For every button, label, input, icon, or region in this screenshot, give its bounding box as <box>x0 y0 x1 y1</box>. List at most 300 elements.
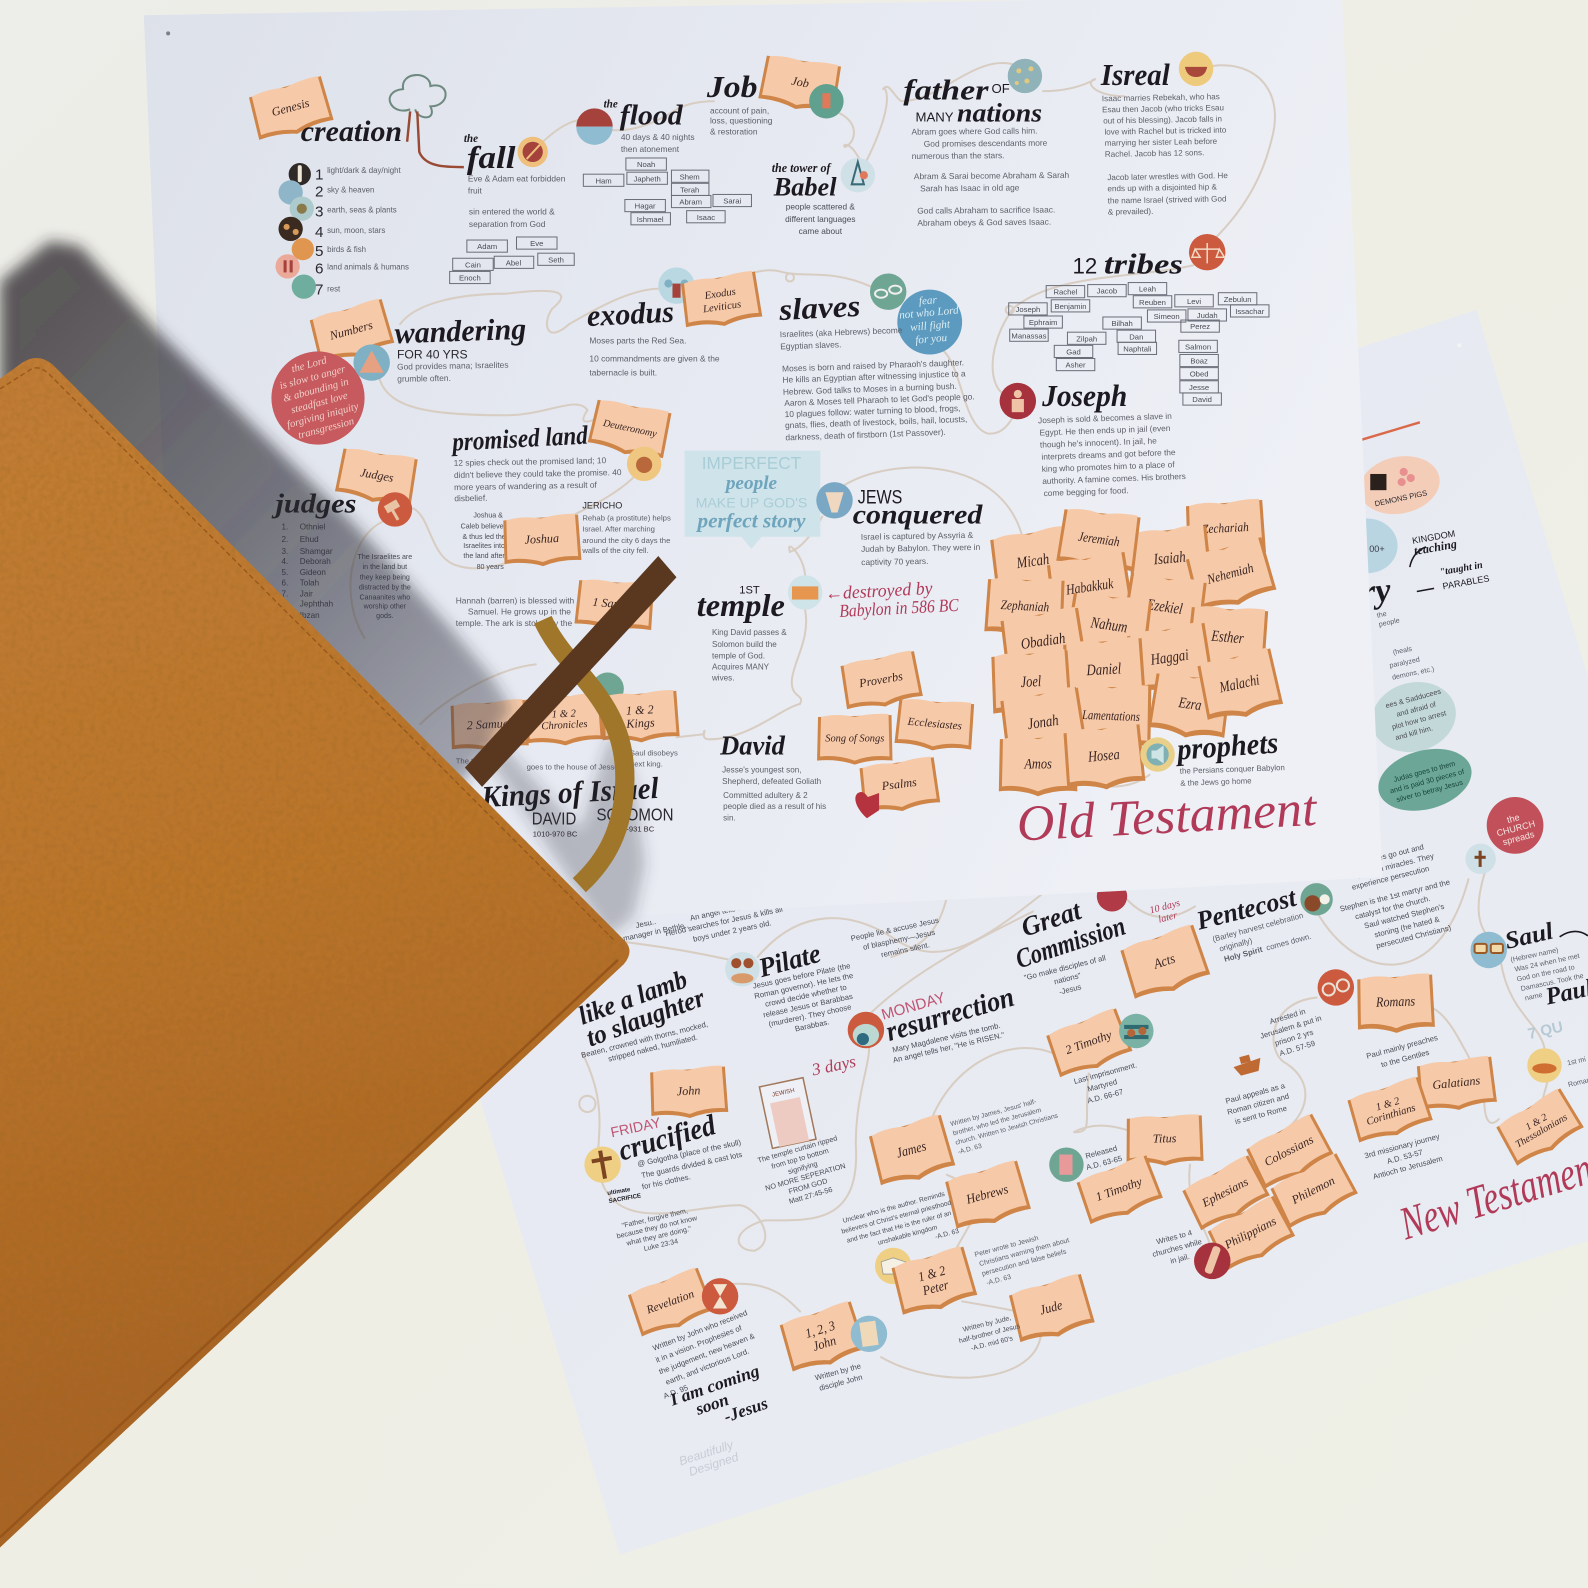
text: Joshua and Caleb: Israelites into <box>463 542 505 550</box>
text: Hebrews: Unclear who is the author. Reminds <box>842 1191 946 1225</box>
heading: resurrection: resurrection <box>883 982 1018 1048</box>
text: judges story: worship other <box>363 603 407 611</box>
text: Father forgive them: because they do not know <box>616 1214 699 1240</box>
text: slaves: Hebrew. God talks to Moses in a burning bush. <box>783 381 957 397</box>
hidden sheet upper-right fragments: paralyzed <box>1389 656 1421 670</box>
text: James: brother, who led the Jerusalem <box>952 1107 1043 1137</box>
text: Writes to 4 churches: in jail. <box>1169 1252 1191 1266</box>
hidden sheet upper-right fragments: Judas goes to them <box>1392 759 1456 784</box>
heading: father of many nations: MANY <box>916 110 954 125</box>
icon: the church spreads: CHURCH <box>1496 818 1536 838</box>
book: Colossians <box>1244 1112 1335 1192</box>
quote: I am coming soon: -Jesus <box>722 1394 771 1426</box>
family tree: Noah: Japheth <box>633 174 661 183</box>
book: Acts <box>1118 923 1212 1003</box>
icon: the church spreads: spreads <box>1502 829 1536 847</box>
text: temple curtain ripped: Matt 27:45-56 <box>788 1185 833 1206</box>
hidden sheet upper-right fragments <box>1337 343 1490 821</box>
list: days of creation: 3 <box>315 204 323 221</box>
book: 1 and 2 Peter: Peter <box>920 1277 950 1299</box>
list: days of creation: land animals & humans <box>327 262 409 271</box>
book: John <box>649 1065 728 1120</box>
text: Job: loss, questioning <box>710 116 773 126</box>
list: days of creation: 4 <box>315 224 323 241</box>
text: 3rd journey: Antioch to Jerusalem <box>1372 1154 1444 1181</box>
hidden sheet upper-right fragments: teaching <box>1413 537 1458 558</box>
hidden sheet upper-right fragments: the <box>1376 610 1387 620</box>
hidden sheet upper-right fragments: 00+ <box>1369 544 1385 554</box>
book: 1 Samuel: 1 Samuel <box>592 595 638 613</box>
text: Jude: -A.D. mid 60's <box>970 1335 1014 1352</box>
book cluster: prophets: Malachi <box>1217 671 1261 696</box>
text: Jericho: Israel. After marching <box>582 525 655 534</box>
text: Arrested: A.D. 57-59 <box>1278 1039 1316 1058</box>
text: Saul story: God on the road to <box>1516 963 1575 983</box>
icon: Joseph coat <box>1000 383 1036 419</box>
list: days of creation: birds & fish <box>327 245 366 254</box>
book: Joshua: Joshua <box>524 531 559 547</box>
heading: father of many nations: father <box>903 75 990 106</box>
book: Titus: Titus <box>1153 1131 1177 1146</box>
text: Holy Spirit: Holy Spirit <box>1223 945 1264 964</box>
family tree: twelve tribes: Zilpah <box>1076 334 1097 343</box>
heading: father of many nations: OF <box>991 81 1010 96</box>
text: Stephen: perform miracles. They <box>1356 851 1435 879</box>
text: Go make disciples: -Jesus <box>1058 982 1082 997</box>
text: Saul story: Was 24 when he met <box>1514 952 1580 974</box>
text: temple: King David passes & <box>712 628 787 637</box>
callout: red verse circle: steadfast love <box>290 391 349 416</box>
text: Arrested: Jerusalem & put in <box>1259 1013 1323 1041</box>
icon: Pilate plate <box>725 952 760 986</box>
text: Stephen: Saul watched Stephen's <box>1363 902 1445 930</box>
list: days of creation: sun, moon, stars <box>327 226 385 235</box>
family tree: twelve tribes: David <box>1192 395 1212 404</box>
book cluster: prophets: Ezra <box>1177 694 1203 714</box>
list: judges: Tolah <box>300 578 319 587</box>
family tree: Noah: Abram <box>679 198 702 207</box>
book cluster: prophets: Hosea <box>1086 746 1120 765</box>
book cluster: prophets: Habakkuk <box>1064 575 1115 598</box>
book cluster: prophets: Zechariah <box>1202 519 1249 537</box>
heading: prophets: prophets <box>1173 726 1279 767</box>
text: Paul preaches: Paul mainly preaches <box>1365 1033 1439 1061</box>
family tree: twelve tribes: Gad <box>1066 347 1081 356</box>
list: days of creation: 6 <box>315 260 323 277</box>
heading: crucified: crucified <box>615 1109 720 1167</box>
text: kings note: goes to the house of Jesse <box>527 763 619 772</box>
list: judges: Jair <box>300 590 313 599</box>
book: 1 2 3 John <box>778 1300 868 1376</box>
family tree: Noah: Isaac <box>697 213 715 222</box>
callout: the Lord will fight for you: fear <box>918 294 938 308</box>
icon: stars <box>1008 59 1042 93</box>
book: 1 and 2 Chronicles <box>524 693 604 747</box>
text: accused: of blasphemy—Jesus <box>862 928 936 952</box>
book: 1 Timothy <box>1075 1154 1164 1228</box>
text: Israel: ends up with a disjointed hip & <box>1107 182 1217 193</box>
text: Released: A.D. 63-65 <box>1085 1154 1123 1172</box>
text: Joseph: Joseph is sold & becomes a slave in <box>1038 411 1172 425</box>
text: Jude: Written by Jude, <box>962 1315 1012 1334</box>
icon: Job figure <box>809 84 844 118</box>
icon: handcuffs <box>1318 969 1354 1006</box>
text: James: -A.D. 63 <box>957 1143 983 1156</box>
callout: red verse circle: forgiving iniquity <box>286 401 360 431</box>
family tree: twelve tribes: Benjamin <box>1054 302 1087 311</box>
text: Abraham: Abram goes where God calls him. <box>911 126 1037 137</box>
heading: father of many nations: nations <box>957 99 1042 128</box>
list: judges: 4. <box>282 557 288 566</box>
text: exodus: Moses parts the Red Sea. <box>589 335 686 345</box>
icon: prison bars <box>1119 1014 1154 1048</box>
icon: forbidden fruit <box>518 137 548 167</box>
book: James <box>867 1113 956 1190</box>
family tree: twelve tribes: Boaz <box>1190 357 1208 366</box>
text: Golgotha: @ Golgotha (place of the skull) <box>637 1138 742 1168</box>
family tree: twelve tribes: Jacob <box>1097 287 1117 296</box>
label: ultimate sacrifice: SACRIFICE <box>608 1193 642 1205</box>
text: Arrested: prison 2 yrs <box>1274 1028 1314 1048</box>
watermark: Designed <box>687 1449 741 1479</box>
family tree: Adam: Cain <box>465 260 481 269</box>
book: Deuteronomy: Deuteronomy <box>601 418 658 440</box>
text: Israel: Jacob later wrestles with God. He <box>1107 171 1228 182</box>
text: prophets: & the Jews go home <box>1180 776 1252 788</box>
text: slaves: Moses is born and raised by Pharaoh's daughter. <box>782 357 964 374</box>
text: Eve and Adam: sin entered the world & <box>469 207 555 217</box>
text: Holy Spirit: comes down. <box>1263 932 1312 953</box>
text: David: Jesse's youngest son, <box>722 766 801 775</box>
callout: the Lord will fight for you: for you <box>915 332 948 347</box>
book cluster: prophets: Nehemiah <box>1205 560 1255 587</box>
label: 3 days: 3 days <box>809 1052 858 1080</box>
text: Writes to 4 churches: churches while <box>1151 1237 1203 1259</box>
book cluster: prophets: Ezekiel <box>1145 596 1184 618</box>
text: judges story: Canaanites who <box>359 594 410 602</box>
text: temple: temple of God. <box>712 651 765 660</box>
heading: the flood: the <box>604 98 618 110</box>
text: Israel: out of his blessing). Jacob falls in <box>1103 114 1222 126</box>
book: 1 and 2 Corinthians: Corinthians <box>1365 1103 1417 1128</box>
text: slaves: darkness, death of firstborn (1st Passover). <box>785 427 946 442</box>
book: Deuteronomy <box>587 396 673 462</box>
heading: Pentecost: Pentecost <box>1193 883 1299 936</box>
heading: wandering: wandering <box>394 312 527 350</box>
book: Proverbs: Proverbs <box>857 669 904 691</box>
text: judges story: distracted by the <box>359 583 411 591</box>
text: kings note: Saul disobeys <box>630 749 678 758</box>
callout: imperfect people: MAKE UP GOD'S <box>696 495 807 511</box>
heading: the fall: fall <box>467 140 516 175</box>
book: 1 and 2 Corinthians: 1 & 2 <box>1375 1096 1402 1113</box>
book: 1 and 2 Kings: Kings <box>625 715 655 731</box>
text: temple curtain ripped: from top to bottom <box>770 1146 830 1171</box>
brown ribbon bookmark <box>465 556 677 787</box>
text: John disciple: disciple John <box>818 1373 863 1393</box>
gold ribbon bookmark <box>543 620 625 885</box>
book: Ephesians <box>1180 1154 1272 1234</box>
heading: 1st temple: 1ST <box>739 584 760 596</box>
text: Pilate story: Roman governor). He lets the <box>753 971 854 1001</box>
family tree: twelve tribes: Bilhah <box>1111 319 1133 328</box>
text: David: sin. <box>723 813 736 822</box>
family tree: twelve tribes: Naphtali <box>1123 344 1152 353</box>
family tree: Noah: Ham <box>595 176 612 185</box>
icon: ascension circle <box>1097 881 1127 911</box>
text: temple: Solomon build the <box>712 640 777 649</box>
heading: 1st temple: temple <box>697 588 785 623</box>
text: Stephen: stoning (he hated & <box>1373 915 1440 939</box>
family tree: twelve tribes: Leah <box>1139 285 1156 294</box>
book: 1 and 2 Peter <box>890 1245 978 1319</box>
note: destroyed by Babylon: ←destroyed by <box>825 578 934 604</box>
book: 1 2 3 John: John <box>811 1333 838 1354</box>
text: manger and Herod fragment: manager in Bethle.. <box>622 920 689 943</box>
quote: I am coming soon: soon <box>692 1390 731 1419</box>
text: Abraham: God calls Abraham to sacrifice Isaac. <box>917 204 1055 216</box>
heading: like a lamb to slaughter: like a lamb <box>574 965 691 1031</box>
label: Monday: MONDAY <box>880 989 947 1024</box>
text: Jericho: around the city 6 days the <box>582 536 670 545</box>
list: judges: Ibzan <box>300 611 320 620</box>
book: John: John <box>676 1083 701 1098</box>
text: first missionary: 1st mi <box>1566 1055 1587 1067</box>
book: 1 Samuel <box>574 577 655 634</box>
heading: kings of Israel: Kings of Israel <box>480 771 660 814</box>
text: promised land: 12 spies check out the promised land; 10 <box>454 455 607 468</box>
heading: tower of Babel: Babel <box>773 172 837 201</box>
text: 40 days: 40 days & 40 nights <box>621 132 695 142</box>
text: Israel: Rachel. Jacob has 12 sons. <box>1105 148 1204 159</box>
family tree: twelve tribes: Ephraim <box>1029 318 1057 327</box>
text: Pilate story: (murderer). They choose <box>768 1002 852 1029</box>
book: Philippians <box>1205 1194 1297 1274</box>
book: Jude: Jude <box>1038 1298 1064 1318</box>
text: Pilate story: release Jesus or Barabbas <box>762 992 854 1020</box>
family tree: twelve tribes: Obed <box>1190 370 1209 379</box>
list: days of creation: light/dark & day/night <box>327 166 401 175</box>
leather Bible <box>0 358 629 1547</box>
text: Last imprisonment: A.D. 66-67 <box>1086 1087 1124 1105</box>
hidden sheet upper-right fragments: ry <box>1360 571 1393 612</box>
text: Paul appeals: is sent to Rome <box>1234 1104 1288 1126</box>
icon: boat <box>1231 1052 1264 1077</box>
text: David: Shepherd, defeated Goliath <box>722 777 821 786</box>
text: Revelation: earth, and victorious Lord. <box>664 1347 750 1387</box>
text: Abraham: Abraham obeys & God saves Isaac. <box>917 217 1051 228</box>
text: temple: wives. <box>711 674 734 683</box>
text: Revelation: A.D. 95 <box>662 1383 689 1401</box>
icon: Saul blinded glasses <box>1471 932 1507 968</box>
text: slaves: He kills an Egyptian after witnessing injustice to a <box>782 368 966 385</box>
list: judges: 1. <box>282 523 288 532</box>
book: Hebrews <box>943 1159 1032 1233</box>
text: Revelation: Written by John who received <box>651 1308 749 1353</box>
icon: cross <box>584 1146 621 1183</box>
heading: Saul: Saul <box>1502 917 1556 955</box>
book: 1 2 3 John: 1, 2, 3 <box>803 1318 837 1341</box>
callout: the Lord will fight for you <box>897 290 962 354</box>
text: wandering: grumble often. <box>397 373 451 384</box>
hidden sheet upper-right fragments: demons, etc.) <box>1391 665 1435 682</box>
text: Holy Spirit: (Barley harvest celebration <box>1211 911 1304 944</box>
text: Beaten: Beaten, crowned with thorns, mocked, <box>580 1020 709 1060</box>
text: Abraham: Abram & Sarai become Abraham & Sarah <box>914 170 1070 181</box>
hidden sheet upper-right fragments: "taught in <box>1439 560 1484 578</box>
list: judges: 6. <box>282 578 288 587</box>
family tree: twelve tribes: Reuben <box>1139 298 1166 307</box>
book: Genesis <box>247 75 335 144</box>
family tree: twelve tribes: Perez <box>1190 322 1210 331</box>
text: temple curtain ripped: signifying <box>787 1159 818 1176</box>
icon: temple curtain: JEWISH <box>772 1088 795 1099</box>
heading: David: David <box>719 731 785 761</box>
callout: imperfect people <box>685 451 820 549</box>
family tree: Adam: Enoch <box>459 274 481 283</box>
text: accused: remains silent. <box>880 940 931 959</box>
book cluster: prophets: Amos <box>1023 755 1052 772</box>
timeline paths: Old Testament <box>350 63 1275 787</box>
text: Holy Spirit: originally) <box>1218 936 1254 954</box>
callout: imperfect people: IMPERFECT <box>702 453 802 473</box>
label: 10 days later: later <box>1157 910 1179 926</box>
list: days of creation: 1 <box>315 166 323 183</box>
quote: I am coming soon: I am coming <box>667 1361 762 1410</box>
text: Writes to 4 churches: Writes to 4 <box>1155 1228 1194 1246</box>
hidden sheet upper-right fragments: and afraid of <box>1395 699 1438 719</box>
text: Eve and Adam: Eve & Adam eat forbidden <box>468 173 566 183</box>
icon: ship storm <box>1527 1048 1562 1083</box>
text: Hebrews: unshakable kingdom <box>877 1224 938 1247</box>
icon: tower <box>841 158 875 192</box>
text: Mary Magdalene: Mary Magdalene visits the tomb. <box>891 1021 1001 1054</box>
icon: crown circle <box>591 672 624 705</box>
hidden sheet upper-right fragments: PARABLES <box>1442 573 1490 591</box>
heading: Job: Job <box>706 70 758 104</box>
icon: heart <box>855 792 879 818</box>
text: Beaten: stripped naked, humiliated. <box>607 1033 699 1064</box>
icon: gavel <box>378 492 412 527</box>
text: Babel: people scattered & <box>786 202 855 212</box>
text: Joshua and Caleb: Caleb believed <box>461 523 508 531</box>
book: Genesis: Genesis <box>270 96 311 119</box>
book: Philemon: Philemon <box>1288 1173 1337 1207</box>
callout: the Lord will fight for you: will fight <box>910 318 951 334</box>
text: Joseph: king who promotes him to a place of <box>1042 459 1175 474</box>
heading: the flood: flood <box>620 101 683 132</box>
text: Stephen: catalyst for the church. <box>1354 894 1431 921</box>
book: Judges: Judges <box>359 465 395 485</box>
heading: like a lamb to slaughter: to slaughter <box>582 983 709 1052</box>
text: Joseph: though he's innocent). In jail, he <box>1040 435 1157 450</box>
text: slaves: Aaron & Moses tell Pharaoh to let God's people go. <box>784 391 975 408</box>
text: manger and Herod fragment: An angel tells Joseph <box>689 899 763 923</box>
book: Song of Songs: Song of Songs <box>825 733 884 744</box>
callout: the Lord will fight for you: not who Lord <box>899 304 960 322</box>
book: Romans: Romans <box>1375 993 1415 1010</box>
list: judges: 8. <box>282 600 288 609</box>
text: David: people died as a result of his <box>723 802 826 811</box>
family tree: twelve tribes: Asher <box>1065 361 1086 370</box>
book: Song of Songs <box>817 714 892 765</box>
icon: tree <box>390 75 464 167</box>
text: Jericho: walls of the city fell. <box>581 546 649 555</box>
family tree: Noah <box>583 158 751 225</box>
book cluster: prophets: Daniel <box>1085 660 1122 680</box>
text: Israel: love with Rachel but is tricked into <box>1104 126 1227 137</box>
icon: megaphone <box>1140 737 1175 772</box>
callout: red verse circle: transgression <box>297 416 355 442</box>
book cluster: prophets: Lamentations <box>1081 707 1140 724</box>
text: Israel: & prevailed). <box>1108 207 1153 217</box>
list: judges: Ehud <box>300 535 319 544</box>
book: Romans <box>1356 973 1435 1034</box>
hidden sheet upper-right fragments: (heals <box>1392 645 1413 657</box>
book cluster: prophets: Isaiah <box>1152 548 1186 569</box>
text: Jude: half-brother of Jesus <box>958 1323 1021 1345</box>
text: Eve and Adam: fruit <box>468 185 483 195</box>
icon: temple curtain <box>759 1078 816 1148</box>
label: ultimate sacrifice: ultimate <box>607 1187 632 1197</box>
family tree: Noah: Noah <box>637 160 655 169</box>
text: promised land: didn't believe they could take the promise. 40 <box>454 467 622 480</box>
text: Abraham: Sarah has Isaac in old age <box>920 182 1020 193</box>
list: David and Solomon dates: 970-931 BC <box>614 824 655 833</box>
list: David and Solomon dates: 1010-970 BC <box>533 830 578 839</box>
book: Philippians: Philippians <box>1221 1214 1279 1252</box>
text: Hannah: Hannah (barren) is blessed with <box>456 596 575 606</box>
icon: the church spreads <box>1487 797 1543 854</box>
text: Israel: Esau then Jacob (who tricks Esau <box>1102 103 1224 114</box>
book: Ecclesiastes <box>894 696 975 754</box>
text: kings note: next king. <box>630 760 663 769</box>
family tree: twelve tribes: Salmon <box>1185 342 1211 351</box>
text: Hebrews: -A.D. 63 <box>934 1228 960 1241</box>
text: Joshua and Caleb: Joshua & <box>473 512 503 520</box>
list: judges: 9. <box>282 611 288 620</box>
text: promised land: more years of wandering as a result of <box>454 480 598 492</box>
heading: slaves: slaves <box>777 289 861 327</box>
text: slaves: Egyptian slaves. <box>780 339 841 351</box>
text: Abraham: numerous than the stars. <box>912 150 1005 161</box>
text: prophets: the Persians conquer Babylon <box>1180 763 1285 776</box>
text: judges story: The Israelites are <box>358 553 412 561</box>
book cluster: prophets: Joel <box>1020 673 1042 692</box>
heading: 12 tribes: 12 <box>1073 253 1097 278</box>
book: Ephesians: Ephesians <box>1199 1174 1251 1210</box>
text: Peter: persecution and false beliefs <box>981 1248 1068 1278</box>
text: judges story: gods. <box>376 612 394 620</box>
text: Pilate story: crowd decide whether to <box>764 983 847 1009</box>
book cluster: prophets: Obadiah <box>1020 631 1066 653</box>
family tree: Noah: Ishmael <box>637 215 664 224</box>
family tree: twelve tribes: Jesse <box>1189 383 1209 392</box>
list: days of creation: 7 <box>315 282 323 299</box>
book: 1 and 2 Kings <box>600 690 680 744</box>
text: promised land: disbelief. <box>454 493 488 503</box>
text: Joseph: authority. A famine comes. His brothers <box>1042 471 1186 486</box>
icon: parted sea <box>658 267 695 304</box>
list: days of creation: earth, seas & plants <box>327 206 397 215</box>
text: manger and Herod fragment: Herod searches for Jesus & kills all <box>665 904 784 938</box>
book cluster: prophets: Nahum <box>1089 614 1129 637</box>
text: Golgotha: for his clothes. <box>641 1172 691 1191</box>
panel: Old Testament sheet <box>144 0 1382 932</box>
heading: Pilate: Pilate <box>754 938 824 983</box>
family tree: twelve tribes: Joseph <box>1016 305 1040 314</box>
heading: Jews conquered: conquered <box>853 500 983 530</box>
